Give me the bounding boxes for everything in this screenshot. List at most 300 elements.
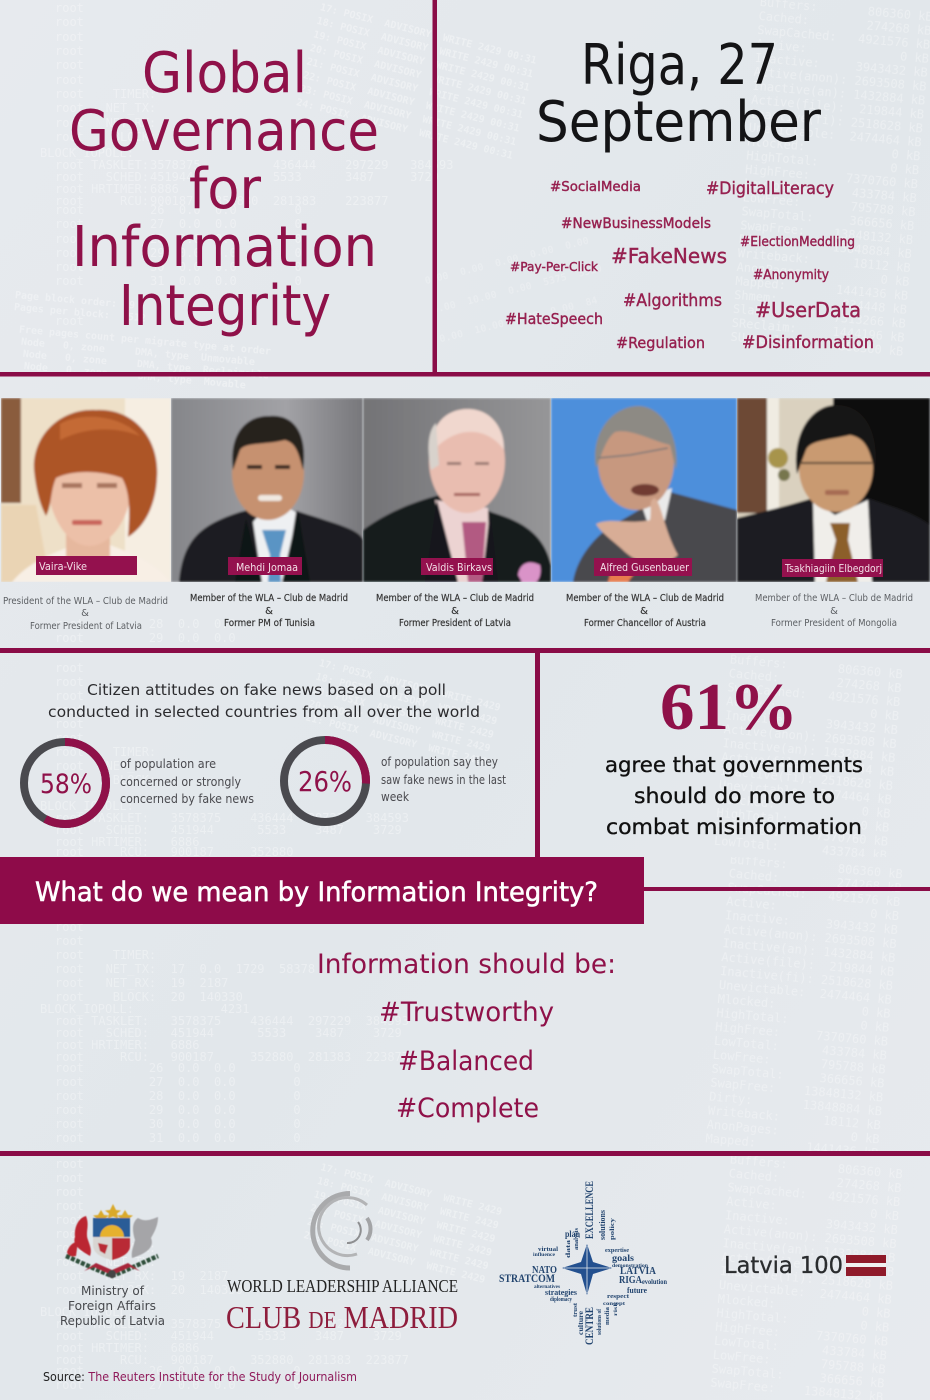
- text: SwapTotal: 366656 kB: [741, 204, 915, 233]
- text: root RCU: 900187 352880: [55, 845, 293, 859]
- word cloud: strategies: [545, 1288, 577, 1297]
- text: root: [55, 1227, 84, 1241]
- text: 19: POSIX ADVISORY WRITE 2429: [311, 685, 495, 741]
- name tag: Valdis Birkavs: Valdis Birkavs: [426, 562, 492, 574]
- list: information should be: [317, 949, 616, 1124]
- donut description: 26%: of population say they: [381, 755, 498, 769]
- text: root: [55, 689, 84, 703]
- text: Active: 0 kB: [726, 894, 900, 923]
- text: root 29 0.0 0.0: [55, 631, 236, 645]
- callout: 61%: combat misinformation: [606, 815, 862, 839]
- text: root 30 0.0 0.0 0: [55, 1117, 301, 1131]
- text: 22: POSIX ADVISORY WRITE 2429 00:31: [302, 70, 521, 135]
- word cloud: evolution: [642, 1278, 667, 1286]
- text: HighTotal: 0 kB: [746, 148, 920, 177]
- word cloud: NATO: [532, 1265, 557, 1276]
- word cloud: respect: [607, 1294, 629, 1300]
- text: root: [55, 1199, 84, 1213]
- text: root TASKLET: 3578375 436444 297229 384593: [55, 811, 409, 825]
- caption: Vaira Vike: &: [81, 608, 89, 619]
- text: 29 0.0 0.0 0: [150, 246, 302, 260]
- text: root 28 0.0 0.0 0: [55, 1089, 301, 1103]
- hashtag cloud: #NewBusinessModels: [561, 216, 711, 232]
- caption: Tsakhiagiin Elbegdorj: Former President of Mongolia: [771, 618, 897, 629]
- text: root NET_RX:: [55, 116, 156, 130]
- text: Inactive(an): 1432884 kB: [752, 79, 926, 108]
- text: 31 0.0 0.0 0: [150, 274, 302, 288]
- portrait: Alfred Gusenbauer: [551, 398, 737, 582]
- text: Active(file): 219844 kB: [721, 1250, 895, 1279]
- text: Dirty: 13848884 kB: [709, 1089, 883, 1119]
- hashtag cloud: #FakeNews: [611, 244, 727, 268]
- word cloud: EXCELLENCE: [582, 1181, 596, 1239]
- text: Slab: 7313266 kB: [732, 302, 906, 331]
- word cloud: demonstration: [612, 1264, 648, 1269]
- text: root NET_RX: 19 2187: [55, 976, 228, 990]
- caption: Alfred Gusenbauer: [566, 593, 724, 629]
- caption: Alfred Gusenbauer: Member of the WLA – Club de Madrid: [566, 593, 724, 604]
- text: root: [55, 246, 84, 260]
- text: root 31 0.0 0.0 0: [55, 1131, 301, 1145]
- text: SwapCached: 4921576 kB: [727, 680, 901, 709]
- text: Node 0, zone DMA, type Movable: [23, 361, 246, 391]
- word cloud: trust: [573, 1303, 579, 1317]
- text: Buffers: 806360 kB: [729, 652, 903, 681]
- text: root: [55, 44, 84, 58]
- text: Free pages count per migrate type at order: [18, 324, 271, 357]
- caption: Mehdi Jomaa: [190, 593, 348, 629]
- list: information should be: #Balanced: [398, 1046, 534, 1077]
- word cloud: alternatives: [534, 1285, 560, 1290]
- word cloud: goals: [612, 1254, 634, 1264]
- text: root HRTIMER:: [55, 182, 149, 196]
- title: Global: [142, 41, 307, 106]
- text: SwapTotal: 366656 kB: [711, 1062, 885, 1091]
- text: root NET_TX:: [55, 101, 156, 115]
- hashtag cloud: [505, 179, 874, 353]
- text: Node 0, zone DMA, type Reclaimable: [22, 348, 269, 381]
- text: Cached: 274268 kB: [728, 666, 902, 695]
- text: root: [55, 703, 84, 717]
- title: Governance: [69, 99, 379, 164]
- title: [69, 41, 379, 339]
- hashtag cloud: #Regulation: [616, 334, 705, 352]
- donut description: 58%: concerned by fake news: [120, 792, 254, 806]
- caption: Valdis Birkavs: Former President of Latvia: [399, 618, 511, 629]
- text: root: [55, 731, 84, 745]
- caption: Alfred Gusenbauer: &: [640, 606, 648, 617]
- text: HighTotal: 0 kB: [716, 806, 890, 835]
- text: root TASKLET: 3578375 436444 297229 384593: [55, 1317, 409, 1331]
- icon: coat of arms: [66, 1204, 158, 1278]
- caption: Alfred Gusenbauer: Former Chancellor of Austria: [584, 618, 706, 629]
- text: root HRTIMER: 6886: [55, 1038, 200, 1052]
- text: 17: POSIX ADVISORY WRITE 2429 00:31: [319, 2, 538, 67]
- text: 28 0.0 0.0 0: [150, 232, 302, 246]
- icon: concentric arcs: [313, 1194, 371, 1268]
- text: root 27 0.0 0.0 0: [55, 1075, 301, 1089]
- text: root: [55, 1157, 84, 1171]
- text: root: [55, 1185, 84, 1199]
- word cloud: data: [566, 1240, 572, 1258]
- callout: 61%: agree that governments: [605, 753, 863, 777]
- text: Active: 0 kB: [726, 1194, 900, 1223]
- text: Active(anon): 2693508 kB: [723, 1222, 897, 1251]
- text: root TIMER:: [55, 948, 156, 962]
- text: BLOCK_IOPOLL:: [40, 1305, 134, 1319]
- logo: Ministry of Foreign Affairs of Latvia: Ministry of: [81, 1283, 145, 1298]
- text: 0.00 0.00 0.00 0.00 0.00: [424, 236, 590, 287]
- text: SReclaim: 1444196 kB: [731, 316, 905, 345]
- portrait: Valdis Birkavs: [363, 398, 551, 582]
- text: BLOCK_IOPOLL: 4231: [40, 1002, 250, 1016]
- text: root TIMER:: [55, 1241, 156, 1255]
- text: 22: POSIX ADVISORY WRITE 2429: [302, 1230, 486, 1286]
- text: AnonPages: 0 kB: [706, 1117, 880, 1146]
- text: root NET_TX:: [55, 1255, 156, 1269]
- text: 19: POSIX ADVISORY WRITE 2429: [313, 1189, 496, 1245]
- text: 30 0.0 0.0 0: [150, 260, 302, 274]
- word cloud: solutions of: [597, 1308, 603, 1335]
- logo: NATO StratCom Centre of Excellence: [499, 1181, 667, 1345]
- word cloud: culture: [577, 1311, 585, 1335]
- text: root BLOCK: 20 140330: [55, 1283, 243, 1297]
- text: Writeback: 18112 kB: [707, 1103, 881, 1133]
- text: SUnreclaim: 888360 kB: [730, 330, 904, 359]
- caption: Vaira Vike: President of the WLA – Club de Madrid: [3, 596, 168, 607]
- text: root SCHED: 451944 5533 3487 3729: [55, 823, 402, 837]
- text: Mlocked: 0 kB: [717, 792, 891, 821]
- donut description: 26%: [381, 755, 506, 804]
- text: root: [55, 15, 84, 29]
- text: root: [55, 1, 84, 15]
- text: Unevictable: 2474464 kB: [718, 978, 892, 1007]
- text: Inactive(fi): 2518628 kB: [720, 1264, 894, 1293]
- text: Inactive: 3943432 kB: [724, 708, 898, 737]
- date and place heading: September: [536, 90, 822, 155]
- text: root NET_TX:: [55, 759, 156, 773]
- text: Cached: 274268 kB: [728, 1166, 902, 1195]
- text: 3578375 436444 297229 384593: [150, 158, 453, 172]
- word cloud: influence: [533, 1253, 556, 1258]
- text: Active(anon): 2693508 kB: [753, 65, 927, 94]
- text: Active: 0 kB: [756, 37, 930, 66]
- name tag: Mehdi Jomaa: Mehdi Jomaa: [236, 562, 298, 574]
- text: root 27 0.0 0.0 0: [55, 1378, 301, 1392]
- caption: Mehdi Jomaa: &: [265, 606, 273, 617]
- word cloud: solutions: [598, 1210, 607, 1240]
- donut chart: 58%: [24, 742, 106, 824]
- text: Unevictable: 2474464 kB: [748, 121, 922, 150]
- text: Active(file): 219844 kB: [751, 93, 925, 122]
- text: SwapTotal: 366656 kB: [711, 1362, 885, 1391]
- text: Inactive: 3943432 kB: [754, 51, 928, 80]
- text: root: [55, 314, 84, 328]
- caption: Tsakhiagiin Elbegdorj: [755, 593, 913, 629]
- text: root RCU:: [55, 194, 149, 208]
- word cloud: media: [605, 1307, 611, 1325]
- name tag: Alfred Gusenbauer: Alfred Gusenbauer: [600, 562, 690, 574]
- text: Inactive(fi): 2518628 kB: [720, 764, 894, 793]
- text: LowFree: 795788 kB: [712, 1048, 886, 1077]
- text: SwapFree: 13848132 kB: [710, 1076, 884, 1105]
- text: 26 0.0 0.0 0: [150, 203, 302, 217]
- poll introduction text: Citizen attitudes on fake news based on a poll: [87, 681, 446, 699]
- banner heading: [0, 857, 644, 924]
- caption: Vaira Vike: [3, 596, 168, 632]
- text: Cached: 274268 kB: [728, 866, 902, 895]
- portrait: Tsakhiagiin Elbegdorj: [737, 398, 930, 582]
- text: Node 0, zone DMA, type Unmovable: [20, 337, 255, 368]
- text: 19: POSIX ADVISORY WRITE 2429 00:31: [312, 29, 531, 94]
- text: Page block order: 9: [14, 290, 135, 311]
- list: information should be: #Trustworthy: [379, 997, 554, 1028]
- name tag: Vaira Vike: Vaira-Vike: [39, 561, 87, 573]
- word cloud: future: [627, 1286, 647, 1295]
- text: SwapFree: 13848132 kB: [740, 218, 914, 247]
- text: LowTotal: 433784 kB: [713, 834, 887, 863]
- text: root BLOCK: 20 140330: [55, 990, 243, 1004]
- text: 18: POSIX ADVISORY WRITE 2429 00:31: [315, 16, 534, 80]
- text: Active: 0 kB: [726, 694, 900, 723]
- logo: World Leadership Alliance Club de Madrid: CLUB DE MADRID: [226, 1299, 458, 1335]
- text: Active(anon): 2693508 kB: [723, 722, 897, 751]
- word cloud: CENTRE: [582, 1307, 596, 1345]
- text: Mapped: 1441436 kB: [705, 1131, 879, 1160]
- name tag: Tsakhiagiin Elbegdorj: Tsakhiagiin Elbegdorj: [784, 563, 882, 575]
- hashtag cloud: #Algorithms: [623, 291, 722, 311]
- hashtag cloud: #ElectionMeddling: [740, 235, 855, 250]
- text: 21: POSIX ADVISORY WRITE 2429 00:31: [305, 57, 524, 121]
- word cloud: RIGA: [619, 1275, 643, 1286]
- text: root 28 0.0 0.0: [55, 617, 236, 631]
- caption: Tsakhiagiin Elbegdorj: &: [830, 606, 838, 617]
- donut description: 26%: week: [381, 790, 409, 804]
- text: LowFree: 795788 kB: [712, 1348, 886, 1377]
- donut chart: 26%: 26%: [298, 765, 352, 798]
- logo: Latvia 100: Latvia 100: [724, 1253, 843, 1279]
- text: HighFree: 7370760 kB: [715, 820, 889, 849]
- text: root SCHED: 451944 5533 3487 3729: [55, 1329, 402, 1343]
- text: Shmem: 834448 kB: [734, 288, 908, 317]
- hashtag cloud: #Pay-Per-Click: [510, 259, 599, 274]
- caption: Mehdi Jomaa: Member of the WLA – Club de Madrid: [190, 593, 348, 604]
- text: root TIMER:: [55, 87, 156, 101]
- text: 18: POSIX ADVISORY WRITE 2429: [316, 1176, 500, 1232]
- text: root 26 0.0 0.0 0: [55, 1364, 301, 1378]
- text: root: [55, 30, 84, 44]
- text: root HRTIMER: 6886: [55, 1341, 200, 1355]
- title: Information: [72, 215, 377, 280]
- hashtag cloud: #SocialMedia: [550, 180, 641, 195]
- text: Mlocked: 0 kB: [717, 1292, 891, 1321]
- title: for: [189, 157, 262, 222]
- word cloud: virtual: [538, 1247, 558, 1253]
- name tag: Valdis Birkavs: [421, 558, 493, 575]
- text: root 26 0.0 0.0 0: [55, 1061, 301, 1075]
- word cloud: STRATCOM: [499, 1273, 555, 1285]
- text: root NET_RX: 19 2187: [55, 1269, 228, 1283]
- text: 900187 352880 281383 223877: [150, 194, 388, 208]
- poll introduction text: [48, 681, 480, 721]
- word cloud: [499, 1181, 667, 1345]
- word cloud: LATVIA: [620, 1266, 657, 1277]
- caption: Mehdi Jomaa: Former PM of Tunisia: [224, 618, 315, 629]
- text: 23: POSIX ADVISORY WRITE 2429 00:31: [298, 84, 517, 148]
- text: Writeback: 18112 kB: [737, 246, 911, 275]
- text: root BLOCK:: [55, 773, 156, 787]
- text: 6886: [150, 182, 179, 196]
- text: root: [55, 58, 84, 72]
- date and place heading: [536, 33, 822, 155]
- text: 20: POSIX ADVISORY WRITE 2429: [309, 1203, 493, 1259]
- text: root: [55, 260, 84, 274]
- text: root RCU: 900187 352880 281383 223877: [55, 1050, 409, 1064]
- text: root: [55, 1171, 84, 1185]
- text: root: [55, 1213, 84, 1227]
- text: Inactive(fi): 2518628 kB: [749, 107, 923, 136]
- text: 24: POSIX ADVISORY WRITE 2429 00:31: [295, 97, 514, 162]
- text: Mapped: 1441436 kB: [735, 274, 909, 303]
- name tag: Tsakhiagiin Elbegdorj: [782, 559, 883, 577]
- list: information should be: #Complete: [396, 1093, 539, 1124]
- text: root: [55, 232, 84, 246]
- text: SwapCached: 4921576 kB: [757, 23, 930, 52]
- callout: 61%: 61%: [660, 670, 798, 744]
- logo: Ministry of Foreign Affairs of Latvia: Republic of Latvia: [60, 1313, 165, 1328]
- title: Integrity: [119, 274, 331, 339]
- text: root SCHED:: [55, 170, 149, 184]
- text: Unevictable: 2474464 kB: [718, 1278, 892, 1307]
- poll introduction text: conducted in selected countries from all over the world: [48, 703, 480, 721]
- text: Inactive(fi): 2518628 kB: [720, 964, 894, 993]
- text: Active(file): 219844 kB: [721, 750, 895, 779]
- callout: 61%: [605, 670, 863, 839]
- text: 451944 5533 3487 3729: [150, 170, 439, 184]
- text: 17: POSIX ADVISORY WRITE 2429: [319, 1162, 503, 1218]
- text: Pages per block: 512: [13, 302, 146, 324]
- banner heading: What do we mean by Information Integrity?: [35, 877, 598, 908]
- text: 0.00 10.00 0.00 5375 3510: [431, 263, 603, 316]
- donut chart: 58%: 58%: [40, 769, 92, 800]
- text: root: [55, 934, 84, 948]
- text: Unevictable: 2474464 kB: [718, 778, 892, 807]
- text: 0.00 10.00 0.00 0.00 84: [438, 295, 599, 345]
- caption: Valdis Birkavs: Member of the WLA – Club de Madrid: [376, 593, 534, 604]
- hashtag cloud: #Disinformation: [742, 333, 874, 353]
- word cloud: expertise: [605, 1248, 629, 1254]
- text: Buffers: 806360 kB: [729, 1152, 903, 1181]
- name tag: Mehdi Jomaa: [228, 557, 302, 575]
- word cloud: diplomacy: [550, 1297, 572, 1303]
- date and place heading: Riga, 27: [581, 33, 778, 98]
- text: HighTotal: 0 kB: [716, 1306, 890, 1335]
- text: Inactive(an): 1432884 kB: [722, 1236, 896, 1265]
- text: 18: POSIX ADVISORY WRITE 2429: [314, 672, 498, 727]
- text: HighFree: 7370760 kB: [745, 162, 919, 191]
- text: SwapCached: 4921576 kB: [727, 1180, 901, 1209]
- text: root HRTIMER: 6886: [55, 835, 200, 849]
- logo: Ministry of Foreign Affairs of Latvia: [60, 1204, 165, 1328]
- text: Dirty: 13848884 kB: [738, 232, 912, 261]
- text: root TIMER:: [55, 745, 156, 759]
- donut description: 58%: [120, 757, 254, 806]
- text: Active(file): 219844 kB: [721, 950, 895, 979]
- text: root TASKLET:: [55, 158, 149, 172]
- hashtag cloud: #HateSpeech: [505, 310, 603, 328]
- text: SwapCached: 4921576 kB: [727, 880, 901, 909]
- logo: World Leadership Alliance Club de Madrid: [226, 1194, 458, 1335]
- text: Inactive: 3943432 kB: [724, 1208, 898, 1237]
- name tag: Alfred Gusenbauer: [594, 558, 692, 576]
- hashtag cloud: #UserData: [755, 298, 861, 322]
- caption: Valdis Birkavs: [376, 593, 534, 629]
- portrait: Mehdi Jomaa: [171, 398, 363, 582]
- text: 21: POSIX ADVISORY WRITE 2429: [304, 712, 488, 768]
- text: root: [55, 217, 84, 231]
- text: Mlocked: 0 kB: [747, 134, 921, 164]
- list: information should be: Information should be:: [317, 949, 616, 980]
- text: AnonPages: 0 kB: [736, 260, 910, 289]
- text: 27 0.0 0.0 0: [150, 217, 302, 231]
- icon: Latvian flag: [846, 1255, 886, 1276]
- text: LowFree: 795788 kB: [742, 190, 916, 219]
- text: Inactive(an): 1432884 kB: [722, 736, 896, 765]
- text: 20: POSIX ADVISORY WRITE 2429 00:31: [309, 43, 527, 107]
- text: Buffers: 806360 kB: [729, 852, 903, 881]
- text: root: [55, 717, 84, 731]
- text: LowTotal: 433784 kB: [743, 176, 917, 205]
- logo: World Leadership Alliance Club de Madrid: WORLD LEADERSHIP ALLIANCE: [227, 1276, 458, 1296]
- caption: Valdis Birkavs: &: [451, 606, 459, 617]
- donut chart: 26%: [284, 740, 366, 822]
- panel: speakers: [1, 398, 930, 632]
- text: 20: POSIX ADVISORY WRITE 2429: [308, 699, 491, 755]
- text: root: [55, 661, 84, 675]
- portrait: Vaira Vike: [1, 398, 171, 582]
- name tag: Vaira Vike: [36, 556, 137, 575]
- word cloud: plan: [565, 1229, 580, 1239]
- text: root: [55, 73, 84, 87]
- logo: Ministry of Foreign Affairs of Latvia: Foreign Affairs: [68, 1298, 156, 1313]
- text: LowTotal: 433784 kB: [713, 1334, 887, 1363]
- text: root: [55, 675, 84, 689]
- icon: compass star: [562, 1244, 612, 1295]
- text: BLOCK_IOPOLL:: [40, 799, 134, 813]
- text: Inactive: 3943432 kB: [724, 908, 898, 937]
- text: 17: POSIX ADVISORY WRITE 2429: [318, 658, 502, 714]
- text: root BLOCK:: [55, 130, 156, 144]
- text: LowTotal: 433784 kB: [713, 1034, 887, 1063]
- callout: 61%: should do more to: [634, 784, 835, 808]
- text: root: [55, 274, 84, 288]
- text: root NET_TX: 17 0.0 1729 58378: [55, 962, 315, 976]
- hashtag cloud: #DigitalLiteracy: [706, 179, 834, 198]
- text: Mlocked: 0 kB: [717, 992, 891, 1021]
- text: Inactive(an): 1432884 kB: [722, 936, 896, 965]
- word cloud: risk: [614, 1302, 619, 1316]
- text: BLOCK_IOPOLL:: [40, 146, 134, 160]
- text: HighFree: 7370760 kB: [715, 1320, 889, 1349]
- donut description: 26%: saw fake news in the last: [381, 773, 506, 787]
- text: root: [55, 203, 84, 217]
- donut description: 58%: concerned or strongly: [120, 775, 241, 789]
- donut description: 58%: of population are: [120, 757, 216, 771]
- text: root RCU: 900187 352880 281383 223877: [55, 1353, 409, 1367]
- caption: Vaira Vike: Former President of Latvia: [30, 621, 142, 632]
- word cloud: analysis: [574, 1227, 580, 1250]
- text: root: [55, 920, 84, 934]
